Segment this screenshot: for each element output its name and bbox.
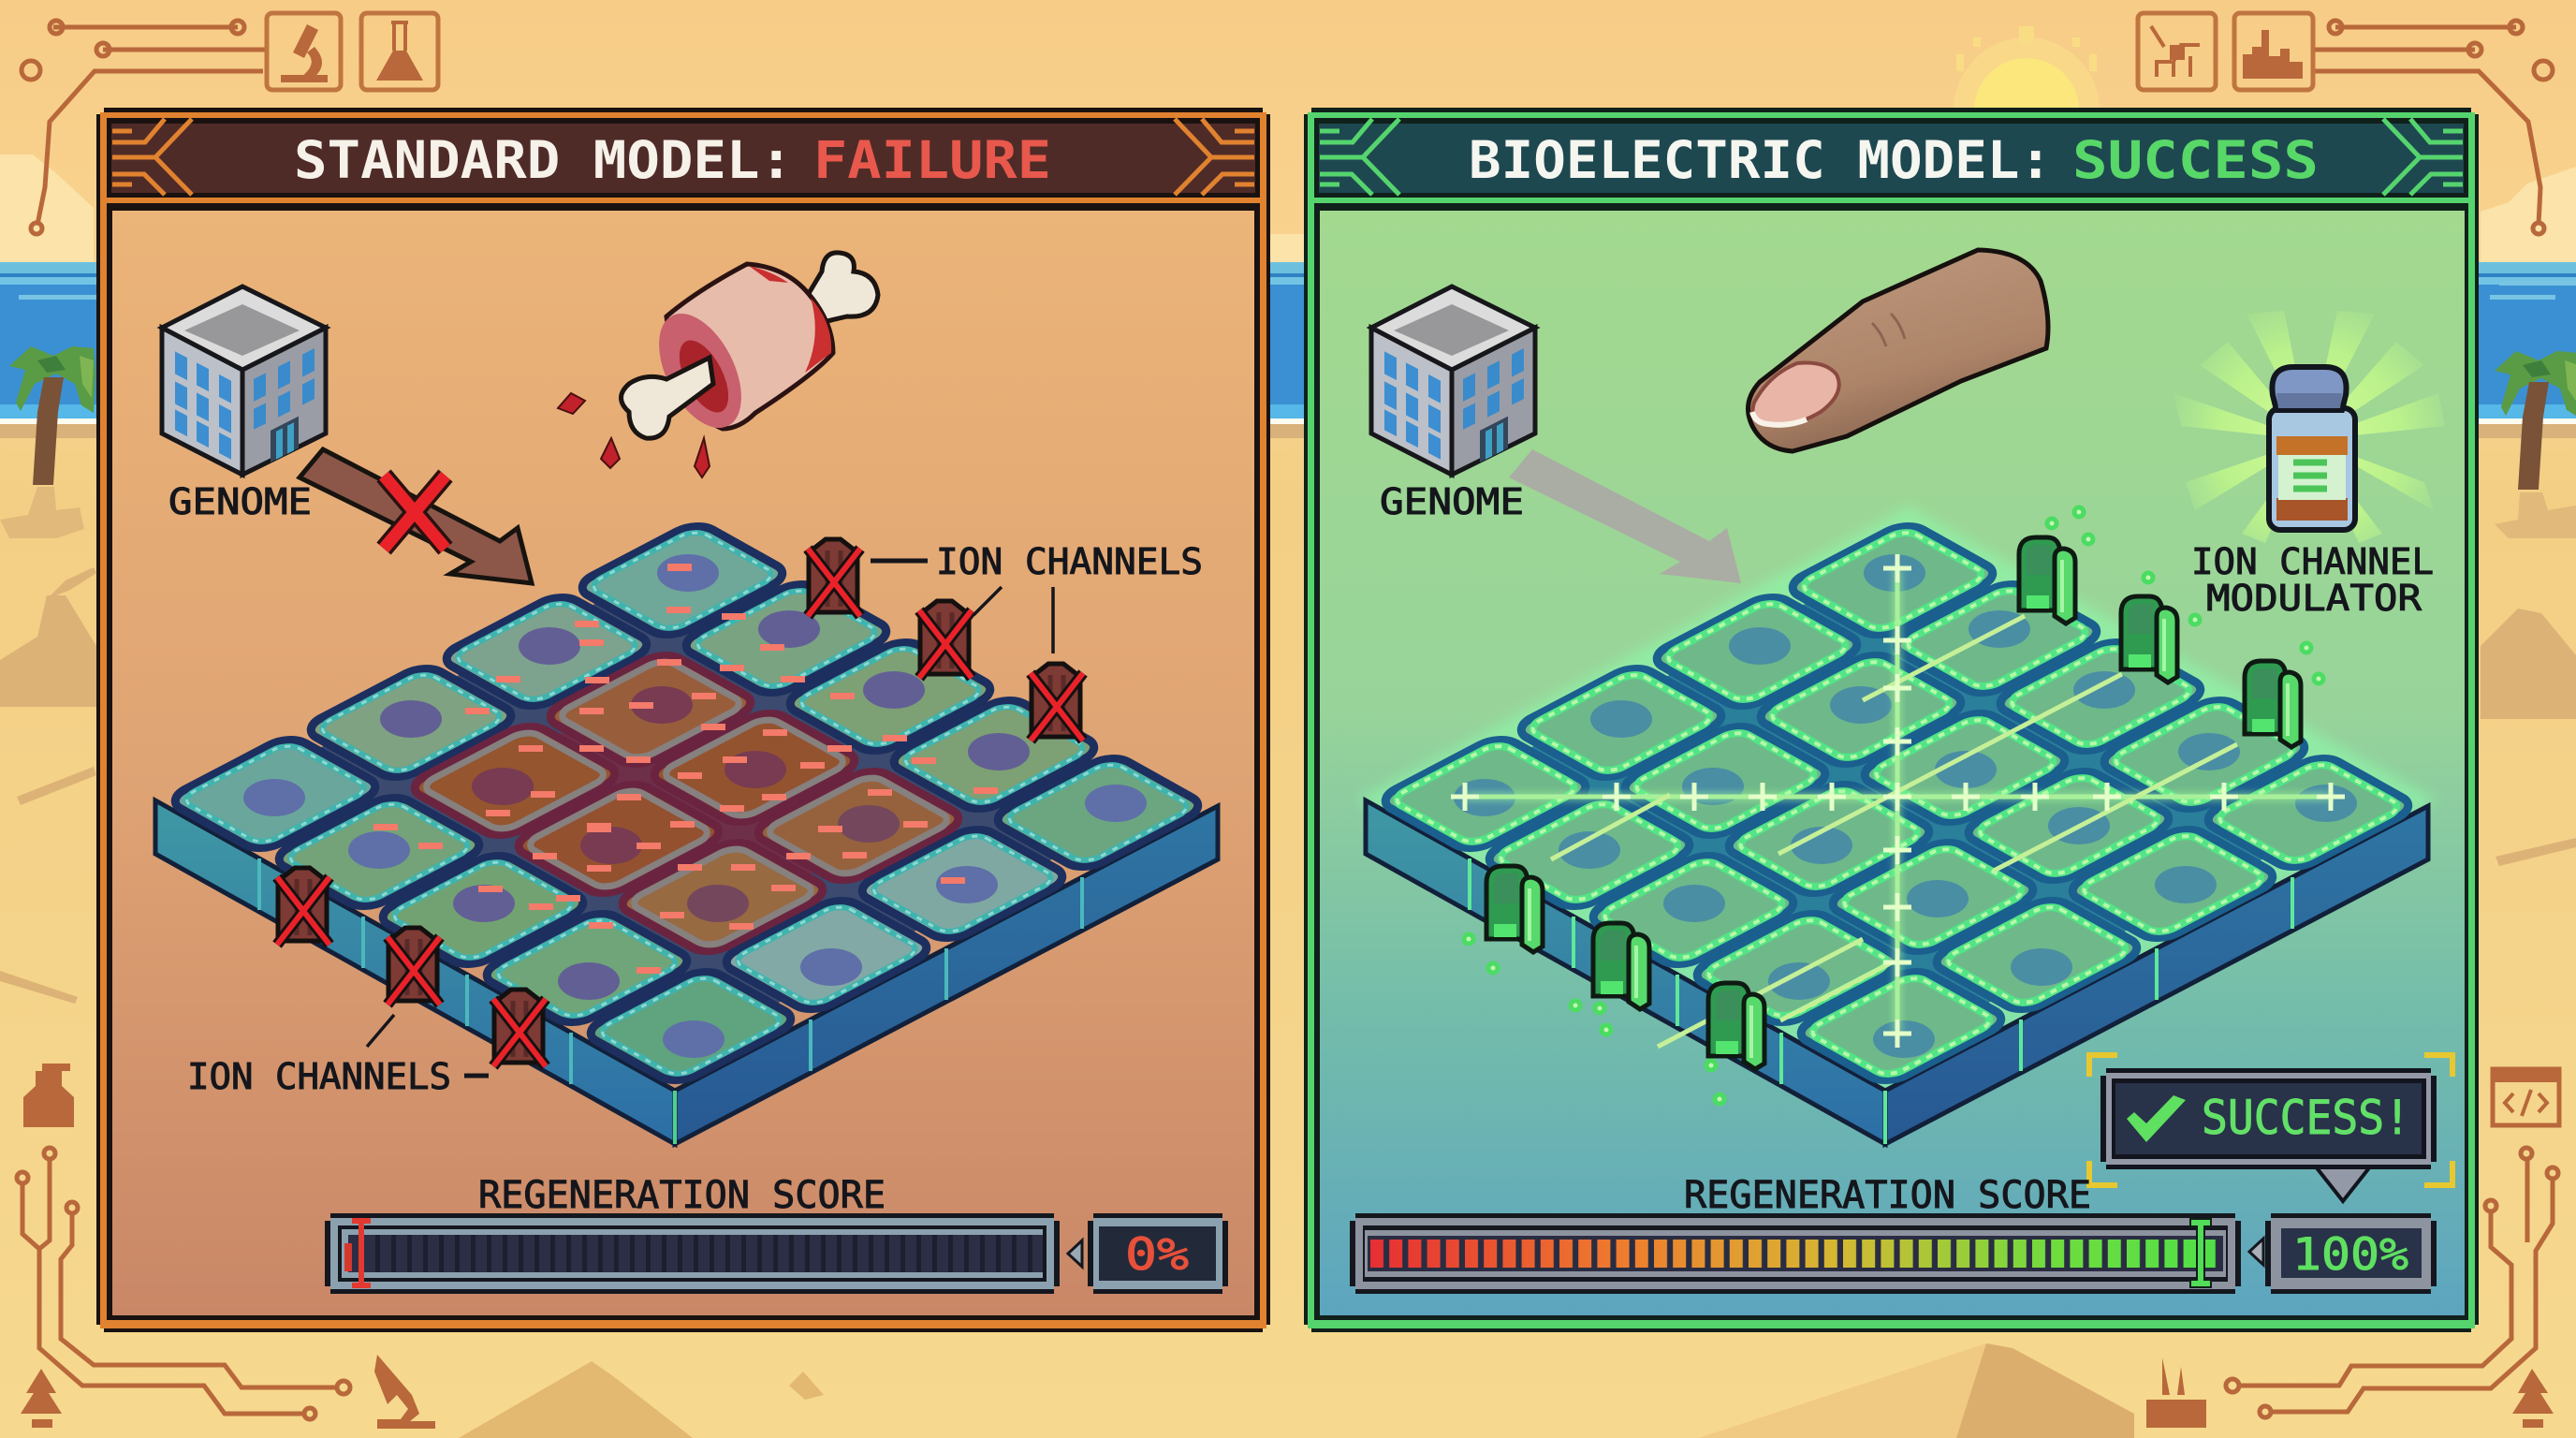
palm tree right — [2495, 351, 2576, 538]
title: FAILURE — [813, 130, 1051, 190]
cell nuclei — [243, 554, 1147, 1058]
callout: success: SUCCESS! — [2202, 1091, 2410, 1145]
marker — [2190, 1219, 2211, 1287]
score box: 100 percent — [2249, 1213, 2437, 1294]
title: SUCCESS — [2072, 130, 2319, 190]
upper bone — [805, 253, 878, 323]
blood drops — [558, 393, 710, 477]
label: ion channels top: ION CHANNELS — [936, 541, 1203, 582]
icon: circuit box — [2138, 13, 2216, 90]
title — [294, 130, 1051, 190]
signal node plus marks — [1451, 554, 2345, 1048]
icon: small tree right — [2512, 1369, 2554, 1428]
arrow: blocked genome signal — [300, 449, 532, 583]
label: ion channel modulator — [2191, 541, 2434, 619]
red ion sparks — [373, 564, 998, 974]
score box: 0 percent — [1068, 1213, 1228, 1294]
icon: genome building — [1371, 286, 1535, 475]
light rays — [2174, 311, 2445, 543]
icon: modulator vial — [2174, 311, 2445, 543]
icon: code window — [2493, 1069, 2559, 1125]
sand dunes — [0, 567, 2576, 1438]
callout: success — [2089, 1055, 2452, 1201]
check mark — [2127, 1095, 2186, 1142]
label: regeneration score left: REGENERATION SCORE — [478, 1174, 886, 1217]
bioelectric signal lines — [1451, 554, 2345, 1048]
icon: severed limb — [558, 253, 878, 477]
score box: 0 percent: 0% — [1125, 1229, 1189, 1281]
blocked ion channels: top edge — [808, 539, 1083, 741]
blocked ion channels: bottom edge — [277, 868, 546, 1066]
label: ion channels bottom — [187, 1015, 489, 1097]
icon: microscope box — [267, 13, 341, 90]
slab: healthy tissue grid — [1350, 506, 2452, 1294]
cell nuclei — [1454, 554, 2357, 1058]
panel: standard model failure — [96, 108, 1270, 1332]
panel frame left — [96, 108, 1270, 1332]
label: ion channels bottom: ION CHANNELS — [187, 1056, 451, 1097]
sea — [0, 262, 2576, 438]
label: genome: GENOME — [168, 481, 312, 522]
icon: small tree left — [21, 1369, 62, 1428]
label: ion channels top — [871, 541, 1203, 653]
progress bar: 100 percent — [1350, 1213, 2241, 1294]
header bar right — [1319, 119, 2464, 195]
icon: microscope bottom — [374, 1355, 435, 1429]
label: ion channel modulator: ION CHANNEL — [2191, 541, 2434, 582]
ion particles — [1464, 507, 2323, 1104]
open ion channels: bottom edge — [1486, 866, 1764, 1069]
icon: bottle — [23, 1064, 74, 1127]
icon: bar chart box — [2234, 13, 2313, 90]
arrow: grey genome signal — [1509, 449, 1741, 583]
title — [1469, 130, 2319, 190]
label: ion channel modulator: MODULATOR — [2206, 578, 2422, 619]
slab side faces — [1366, 800, 2428, 1144]
panel: bioelectric model success — [1304, 108, 2479, 1332]
score box: 100 percent: 100% — [2292, 1229, 2408, 1281]
label: genome: GENOME — [1380, 481, 1524, 522]
icon: red cross on arrow — [384, 476, 446, 549]
title: STANDARD MODEL: — [294, 130, 793, 190]
tissue cells — [165, 521, 1208, 1085]
flesh — [666, 264, 833, 429]
soft green glow — [1356, 506, 2437, 1100]
open ion channels: top edge — [2019, 537, 2301, 747]
icon: regenerated finger — [1749, 250, 2048, 451]
cut face — [642, 301, 758, 441]
panel frame right — [1304, 108, 2479, 1332]
icon: factory bottom — [2146, 1357, 2206, 1428]
cream clouds — [0, 154, 2576, 264]
progress bar: 0 percent — [325, 1213, 1060, 1294]
icon: genome building — [162, 286, 326, 475]
slab side faces — [155, 800, 1218, 1144]
tissue cells — [1375, 521, 2419, 1085]
label: regeneration score right: REGENERATION SCORE — [1684, 1174, 2091, 1217]
header bar left — [111, 119, 1255, 195]
icon: flask box — [361, 13, 438, 90]
sun — [1954, 26, 2100, 183]
marker — [352, 1218, 371, 1288]
title: BIOELECTRIC MODEL: — [1469, 130, 2052, 190]
lower bone — [622, 358, 713, 438]
corner brackets — [2089, 1055, 2452, 1185]
palm tree left — [0, 346, 95, 538]
slab: damaged tissue grid — [155, 521, 1218, 1144]
